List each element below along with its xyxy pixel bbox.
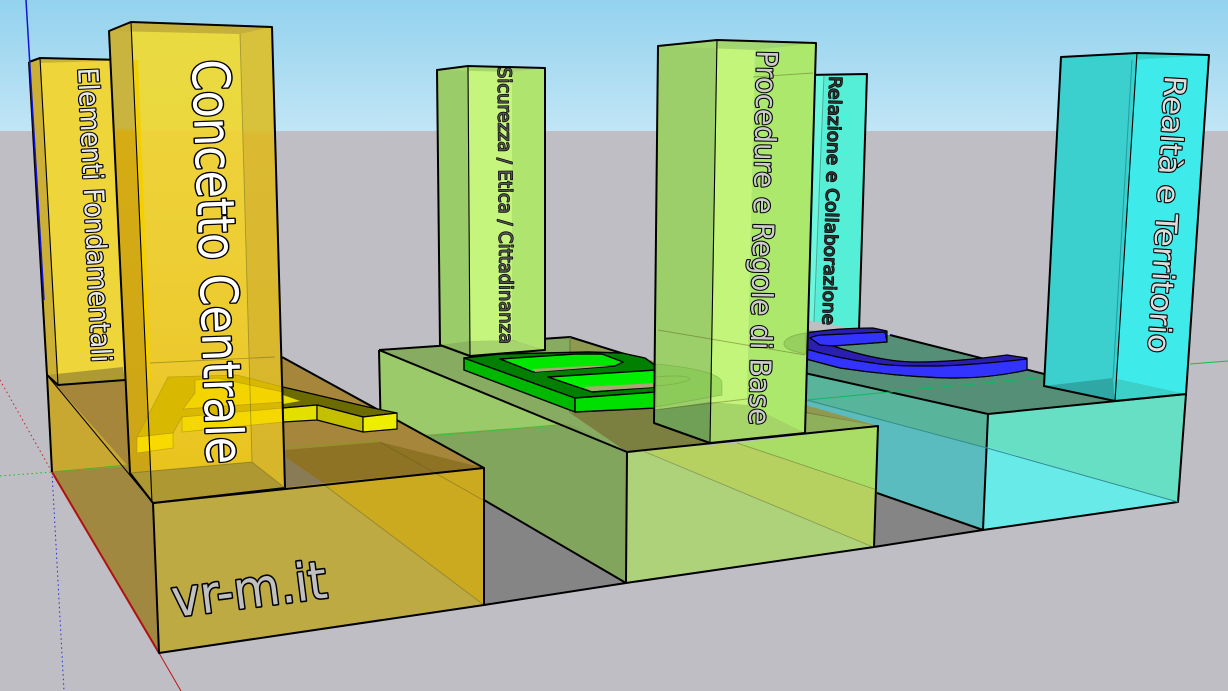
- icon: blue letter U: [806, 328, 1027, 378]
- panel: procedure tower: [654, 40, 816, 443]
- icon: letter B seen through tower: [656, 364, 722, 407]
- icon: yellow letter A: [283, 387, 397, 432]
- label: elementi fondamentali: Elementi Fondamentali: [71, 67, 118, 363]
- label: procedure e regole di base: Procedure e Regole di Base: [742, 50, 784, 425]
- label: relazione e collaborazione: Relazione e Collaborazione: [818, 76, 844, 325]
- icon: letter A seen through tower: [137, 375, 283, 453]
- icon: green letter B: [464, 352, 656, 412]
- panel: relazione tower: [800, 74, 867, 330]
- panel: cyan base block: [800, 330, 1186, 530]
- panel: yellow base block: [47, 357, 484, 653]
- shadowed ground between blocks: [484, 492, 983, 605]
- panel: concetto tower: [109, 22, 285, 503]
- label: concetto centrale: Concetto Centrale: [179, 58, 254, 465]
- label: realta e territorio: Realtà e Territorio: [1140, 75, 1192, 354]
- label: vr-m.it: vr-m.it: [168, 551, 330, 630]
- panel: green base block: [379, 337, 878, 583]
- icon: letter U seen through tower: [784, 333, 806, 354]
- sky: [0, 0, 1228, 131]
- axes: [0, 361, 1228, 691]
- panel: elementi tower: [26, 0, 138, 385]
- panel: realta tower: [1044, 53, 1209, 401]
- panel: sicurezza tower: [437, 66, 545, 356]
- label: sicurezza etica cittadinanza: Sicurezza / Etica / Cittadinanza: [493, 67, 516, 344]
